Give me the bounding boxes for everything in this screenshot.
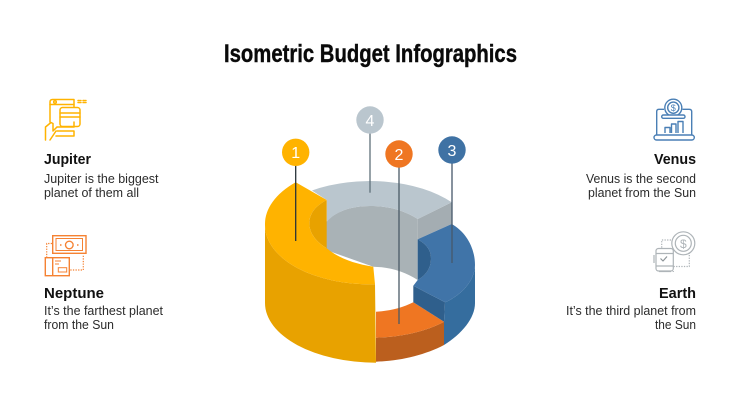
segment 2: orange xyxy=(376,302,444,362)
callout 1 xyxy=(282,139,309,241)
text: Earth description: It’s the third planet from xyxy=(566,304,696,318)
segment 4: gray xyxy=(312,181,452,280)
icon: phone and card xyxy=(46,100,86,140)
heading: Earth: Earth xyxy=(659,285,696,302)
callout 3: 3 xyxy=(448,143,457,160)
text: Venus description: planet from the Sun xyxy=(588,186,696,200)
callout 2: 2 xyxy=(395,147,404,164)
callout 4 xyxy=(356,106,384,193)
heading: Jupiter: Jupiter xyxy=(44,151,91,168)
text: Neptune description xyxy=(44,304,164,332)
text: Venus description xyxy=(586,172,696,200)
text: Jupiter description: Jupiter is the biggest xyxy=(44,172,159,186)
text: Neptune description: from the Sun xyxy=(44,318,114,332)
title: Isometric Budget Infographics xyxy=(224,40,517,68)
icon glyph: dollar sign: $ xyxy=(671,103,676,113)
text: Earth description: the Sun xyxy=(655,318,696,332)
callout 3 xyxy=(438,136,466,263)
panel: Jupiter xyxy=(44,100,159,200)
callout 4: 4 xyxy=(366,113,375,130)
panel: Venus xyxy=(586,99,696,200)
text: Jupiter description xyxy=(44,172,159,200)
segment 3: blue xyxy=(413,224,475,345)
callout 2 xyxy=(385,140,413,324)
segment 1: yellow xyxy=(265,182,376,363)
panel: Earth xyxy=(566,232,696,332)
text: Jupiter description: planet of them all xyxy=(44,186,139,200)
panel: Neptune xyxy=(44,236,164,332)
text: Venus description: Venus is the second xyxy=(586,172,696,186)
callout 1: 1 xyxy=(291,145,300,162)
heading: Neptune: Neptune xyxy=(44,285,104,302)
heading: Venus: Venus xyxy=(654,151,696,168)
chart: isometric ring xyxy=(265,106,475,363)
icon: watch and coin xyxy=(654,232,695,272)
icon: banknote and box xyxy=(45,236,86,276)
text: Earth description xyxy=(566,304,696,332)
icon: laptop with coin and bars xyxy=(654,99,694,140)
text: Neptune description: It’s the farthest planet xyxy=(44,304,164,318)
icon glyph: dollar sign: $ xyxy=(680,237,687,251)
